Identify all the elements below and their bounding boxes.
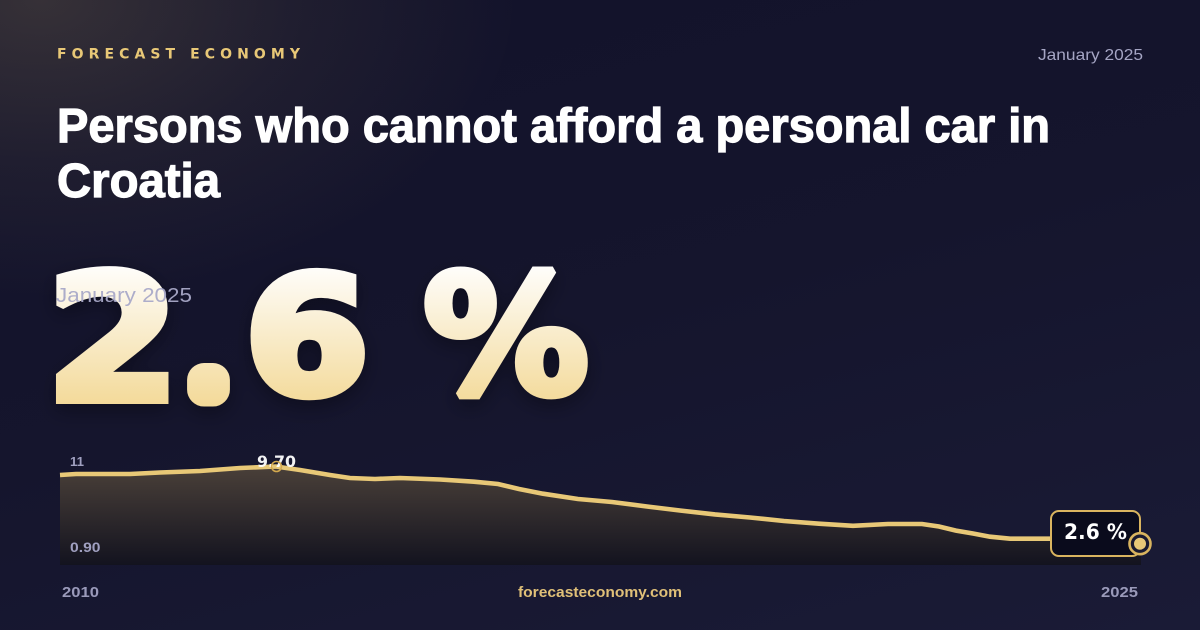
x axis end label: 2025 (1101, 585, 1138, 601)
latest value marker (1130, 533, 1150, 554)
chart line (60, 466, 1052, 539)
kicker: brand: FORECAST ECONOMY (57, 46, 301, 62)
big value (45, 239, 589, 442)
date top right: January 2025 (1038, 47, 1143, 64)
area chart (60, 452, 1150, 565)
title (57, 100, 1050, 208)
chart area fill (60, 466, 1141, 565)
title: Croatia (57, 155, 220, 208)
big value: 2 (45, 239, 181, 442)
big value: . (199, 344, 218, 402)
big value: % (423, 240, 589, 432)
latest value callout (1051, 511, 1140, 556)
title: Persons who cannot afford a personal car in (57, 100, 1050, 153)
y axis min label: 0.90 (70, 539, 101, 555)
peak value label: 9.70 (257, 452, 296, 471)
y axis max label: 11 (70, 454, 84, 469)
latest value callout: 2.6 % (1064, 520, 1127, 544)
peak marker (272, 462, 282, 472)
big value: 6 (245, 244, 369, 432)
date overlay: January 2025 (56, 284, 192, 307)
footer site name: forecasteconomy.com (518, 585, 682, 601)
x axis start label: 2010 (62, 585, 99, 601)
